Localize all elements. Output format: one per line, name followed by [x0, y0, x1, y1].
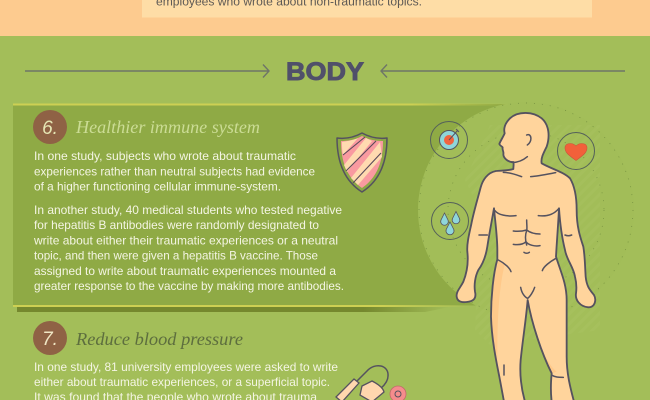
background circle	[418, 102, 634, 345]
panel: section 6 background	[13, 104, 510, 312]
title: BODY	[286, 58, 364, 86]
text block: section 6 second paragraph: topic, and then were given a hepatitis B vaccine. Those	[34, 248, 318, 262]
icon: shield	[337, 133, 387, 192]
text block: section 6 second paragraph: for hepatitis B antibodies were randomly designated to	[34, 218, 319, 232]
arrow: left	[25, 64, 269, 78]
panel: top section	[0, 0, 650, 36]
arrow: right	[381, 64, 625, 78]
text block: section 6 first paragraph	[34, 149, 315, 194]
panel accent lines	[13, 104, 510, 307]
figure: human body	[457, 113, 595, 400]
text block: section 6 second paragraph: greater response to the vaccine by making more antibodies.	[34, 279, 344, 293]
text block: section 7: either about traumatic experiences, or a superficial topic.	[34, 375, 330, 389]
number badge 7: 7.	[42, 329, 58, 350]
number badge 6	[33, 110, 67, 144]
icon: target	[430, 122, 468, 158]
text block: section 6 first paragraph: of a higher functioning cellular immune-system.	[34, 180, 281, 194]
heading: reduce blood pressure: Reduce blood pressure	[75, 329, 243, 349]
text block: section 7: In one study, 81 university employees were asked to write	[34, 360, 338, 374]
text block: section 6 first paragraph: experiences rather than neutral subjects had evidence	[34, 164, 315, 178]
text block: section 6 first paragraph: In one study, subjects who wrote about traumatic	[34, 149, 296, 163]
gauge	[390, 386, 406, 400]
icon: heart	[558, 132, 594, 170]
heading: body	[25, 58, 625, 86]
icon: water drops	[432, 202, 468, 240]
number badge 7	[33, 321, 67, 355]
text block: section 6 second paragraph: write about either their traumatic experiences or a neutral	[33, 234, 338, 248]
note box	[142, 0, 592, 18]
heading: healthier immune system: Healthier immune system	[75, 117, 260, 137]
number badge 6: 6.	[42, 118, 58, 139]
text block: section 6 second paragraph	[33, 203, 344, 293]
text block: section 6 second paragraph: assigned to write about traumatic experiences mounted a	[34, 264, 336, 278]
body detail lines	[479, 135, 572, 377]
icon: blood pressure monitor	[336, 366, 406, 400]
dotted rings	[419, 103, 633, 317]
skin shading	[492, 260, 557, 373]
hatching behind figure	[465, 125, 600, 345]
text block: section 6 second paragraph: In another study, 40 medical students who tested negative	[34, 203, 342, 217]
panel bottom shadow	[17, 307, 450, 312]
body outline	[457, 113, 595, 400]
text block: section 7	[34, 360, 338, 400]
